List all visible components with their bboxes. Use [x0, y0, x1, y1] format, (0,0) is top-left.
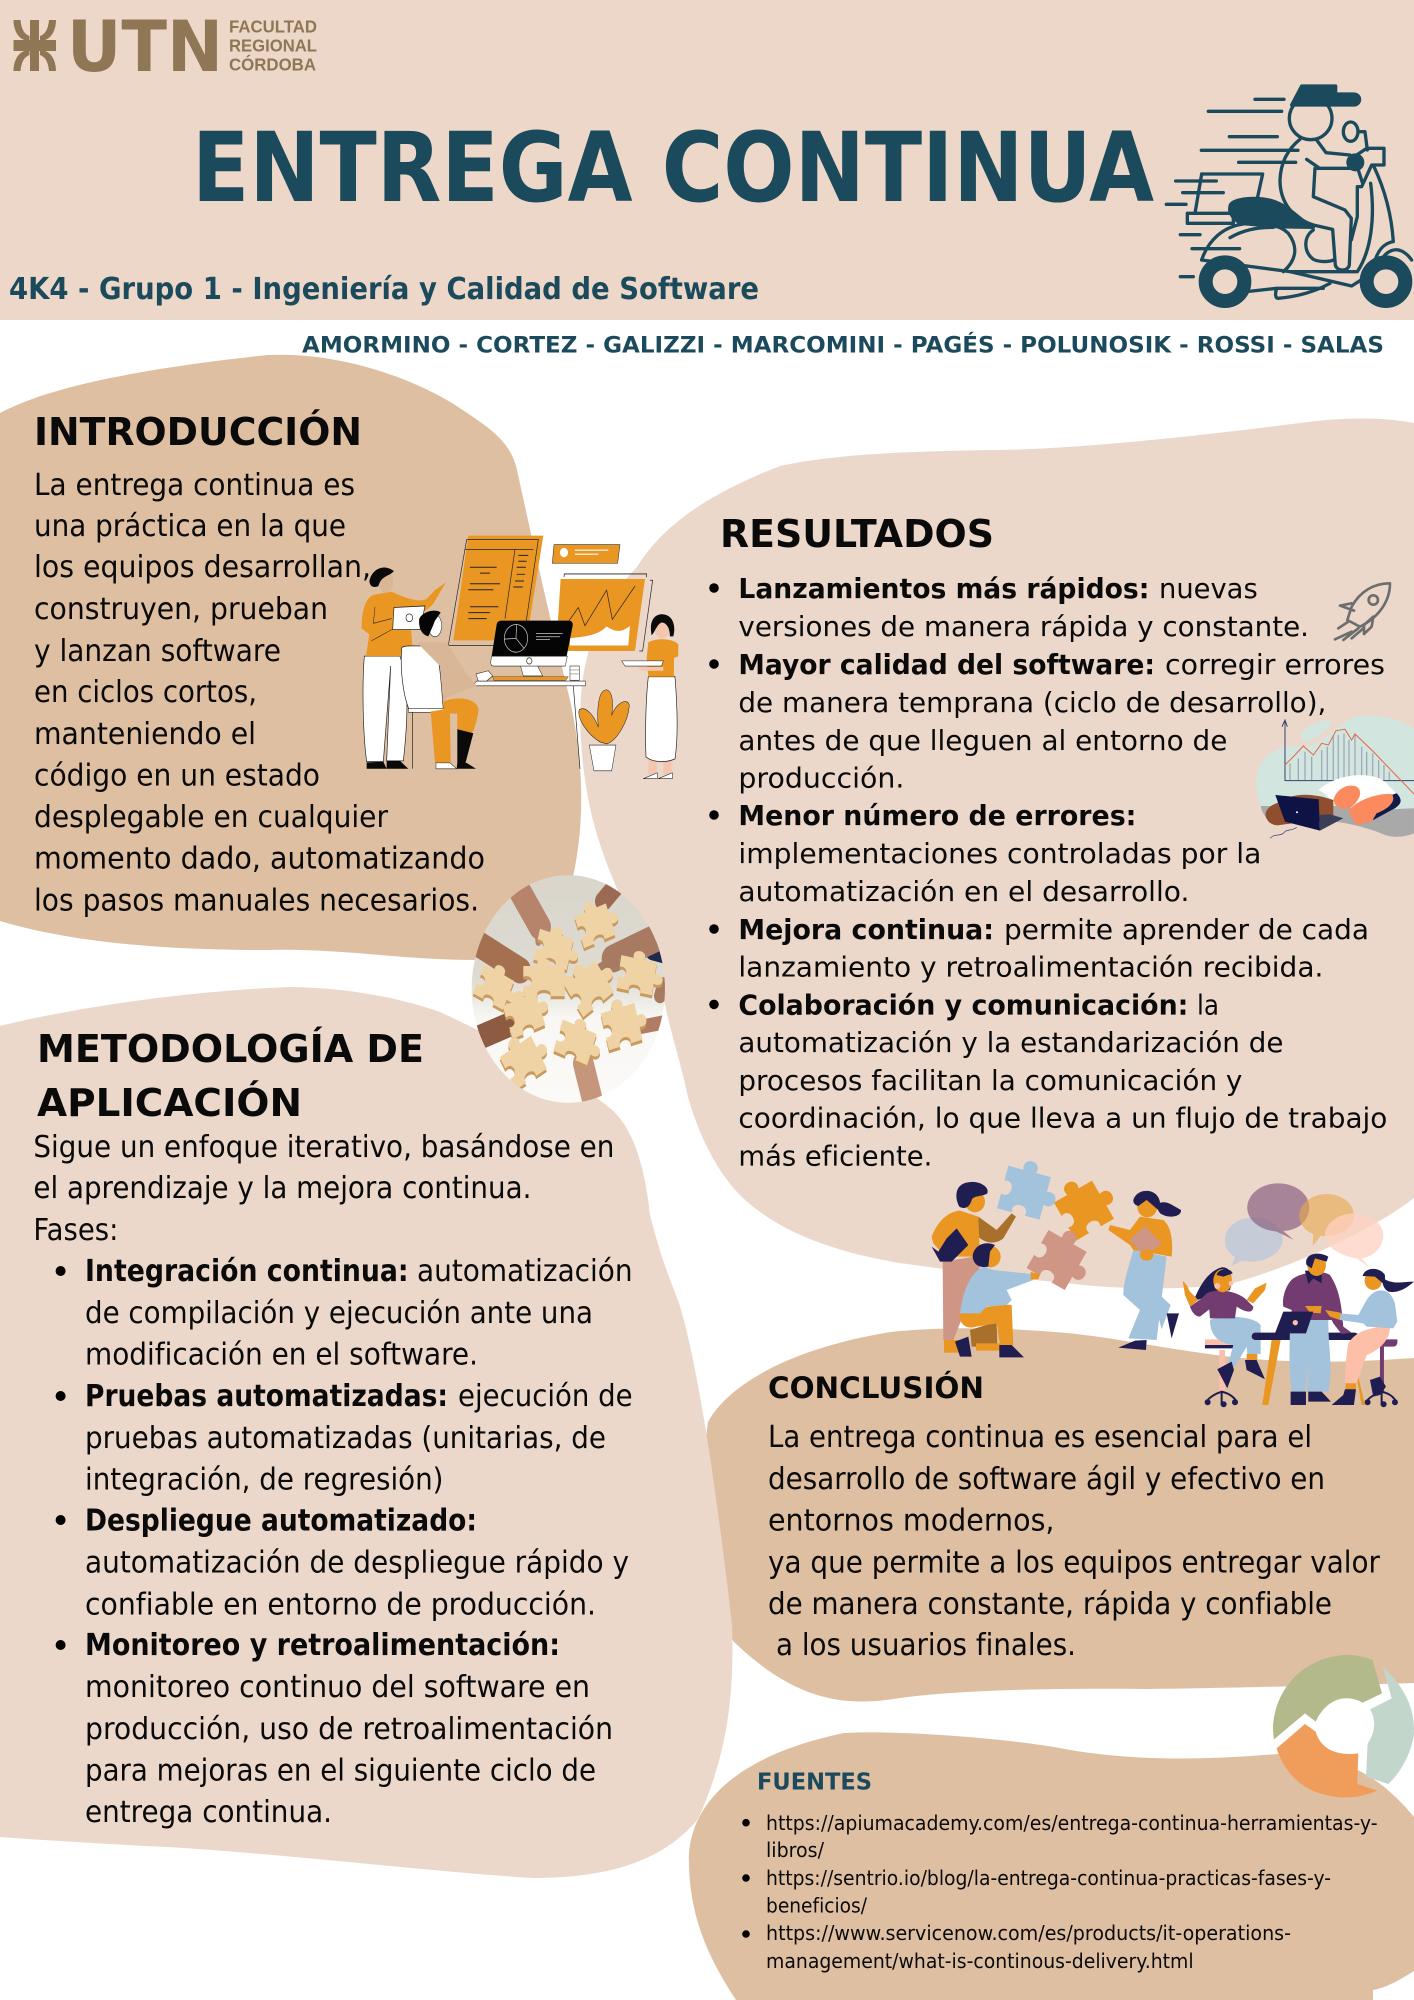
list: fases: automatización	[417, 1254, 633, 1289]
text block: conclusion: La entrega continua es esencial para el	[768, 1420, 1312, 1455]
text block: introduccion: y lanzan software	[34, 634, 281, 669]
line chart panel	[556, 574, 653, 651]
header band	[0, 0, 1414, 320]
panel: introduccion background	[0, 355, 581, 960]
list: fuentes: libros/	[766, 1838, 824, 1862]
text block: introduccion: desplegable en cualquier	[34, 800, 388, 835]
list: resultados: Mejora continua:	[738, 913, 994, 946]
heading: metodologia: APLICACIÓN	[37, 1079, 302, 1126]
monitor	[491, 621, 573, 676]
code panel	[448, 536, 543, 645]
desk	[473, 666, 585, 769]
text block: conclusion	[768, 1420, 1380, 1663]
list: fases: producción, uso de retroalimentación	[85, 1712, 613, 1747]
list: fases: integración, de regresión)	[85, 1462, 444, 1497]
logo subtitle: FACULTAD	[229, 17, 317, 37]
woman holding piece	[1108, 1191, 1181, 1350]
list: resultados: automatización en el desarrollo.	[738, 875, 1189, 908]
list: fases: Integración continua:	[85, 1254, 409, 1289]
text block: introduccion: código en un estado	[34, 758, 320, 794]
standing man	[362, 568, 446, 769]
list: resultados: nuevas	[1159, 572, 1258, 605]
standing woman	[622, 614, 678, 779]
text block: introduccion: momento dado, automatizando	[34, 842, 485, 876]
list: resultados: lanzamiento y retroalimentación recibida.	[738, 951, 1323, 984]
standing man at laptop	[1275, 1254, 1352, 1405]
list: resultados: Colaboración y comunicación:	[738, 988, 1188, 1021]
list: resultados: más eficiente.	[738, 1139, 932, 1172]
text block: introduccion: los pasos manuales necesarios.	[34, 884, 479, 918]
logo subtitle: REGIONAL	[229, 36, 317, 56]
seated person	[401, 611, 493, 769]
text block: introduccion: en ciclos cortos,	[34, 675, 257, 710]
puzzle pieces	[472, 910, 663, 1089]
hands	[470, 885, 668, 1097]
seated woman right	[1325, 1269, 1414, 1407]
list: resultados: permite aprender de cada	[1004, 913, 1369, 946]
panel: fuentes background	[689, 1732, 1414, 2000]
plant	[579, 690, 629, 771]
list: fases: entrega continua.	[85, 1795, 332, 1830]
text block: introduccion: La entrega continua es	[34, 468, 355, 503]
list: resultados: versiones de manera rápida y constante.	[738, 610, 1309, 643]
list: resultados	[709, 572, 1387, 1172]
list: resultados: implementaciones controladas por la	[738, 837, 1261, 870]
subtitle: 4K4 - Grupo 1 - Ingeniería y Calidad de Software	[9, 272, 759, 307]
list: resultados: de manera temprana (ciclo de desarrollo),	[738, 686, 1326, 719]
table group: seated woman	[1183, 1267, 1267, 1407]
list: fases: Monitoreo y retroalimentación:	[85, 1628, 560, 1663]
crouching man	[955, 1243, 1040, 1357]
text block: conclusion: de manera constante, rápida y confiable	[768, 1587, 1332, 1622]
illustration: developers at desk	[362, 536, 678, 779]
list: fuentes: https://sentrio.io/blog/la-entrega-continua-practicas-fases-y-	[766, 1866, 1331, 1890]
list: fuentes: management/what-is-continous-delivery.html	[766, 1949, 1194, 1973]
logo: UTN	[14, 6, 317, 88]
list: resultados: la	[1197, 988, 1219, 1021]
list: fases: Despliegue automatizado:	[85, 1504, 477, 1538]
text block: conclusion: entornos modernos,	[768, 1504, 1054, 1538]
list: resultados: Mayor calidad del software:	[738, 648, 1155, 681]
text block: introduccion	[34, 468, 485, 918]
list: fases: automatización de despliegue rápido y	[85, 1546, 629, 1581]
panel: resultados background	[580, 418, 1414, 1288]
puzzle pieces	[997, 1156, 1123, 1295]
illustration: tired developer with falling chart	[1257, 716, 1414, 838]
list: resultados: producción.	[738, 762, 904, 794]
photo: hands assembling puzzle	[467, 872, 670, 1109]
icon: rocket	[1335, 583, 1390, 640]
heading: metodologia: METODOLOGÍA DE	[37, 1025, 424, 1072]
list: fases: monitoreo continuo del software en	[85, 1670, 590, 1705]
list: fases: para mejoras en el siguiente ciclo de	[85, 1754, 596, 1788]
list: fuentes	[742, 1811, 1378, 1973]
logo subtitle	[229, 17, 317, 75]
list: fuentes: https://www.servicenow.com/es/products/it-operations-	[766, 1921, 1291, 1945]
text block: metodologia intro	[33, 1130, 614, 1248]
logo wordmark: UTN	[67, 6, 223, 88]
text block: introduccion: manteniendo el	[34, 717, 256, 752]
icon: UTN emblem	[14, 20, 56, 71]
panel: metodologia background	[0, 987, 733, 1878]
list: fuentes: beneficios/	[766, 1894, 867, 1918]
text block: conclusion: desarrollo de software ágil y efectivo en	[768, 1462, 1325, 1497]
list: resultados: procesos facilitan la comunicación y	[738, 1064, 1242, 1097]
list: fases: ejecución de	[458, 1379, 633, 1414]
list: resultados: automatización y la estandarización de	[738, 1026, 1283, 1059]
list: fases: de compilación y ejecución ante una	[85, 1296, 593, 1331]
speech bubbles	[1225, 1183, 1383, 1267]
list: resultados: antes de que lleguen al entorno de	[738, 724, 1227, 757]
table	[1252, 1333, 1365, 1405]
standing woman with book	[932, 1182, 1016, 1353]
text block: metodologia intro: el aprendizaje y la mejora continua.	[33, 1171, 531, 1206]
heading: resultados: RESULTADOS	[720, 512, 994, 557]
icon: continuous cycle ring	[1273, 1655, 1414, 1798]
heading: metodologia	[37, 1025, 424, 1126]
notification card	[552, 545, 620, 563]
heading: conclusion: CONCLUSIÓN	[768, 1371, 984, 1405]
list: fases: pruebas automatizadas (unitarias, de	[85, 1421, 606, 1456]
text block: introduccion: una práctica en la que	[34, 509, 346, 544]
text block: metodologia intro: Sigue un enfoque iterativo, basándose en	[33, 1130, 614, 1165]
list: resultados: coordinación, lo que lleva a un flujo de trabajo	[738, 1102, 1387, 1135]
list: fases: confiable en entorno de producción.	[85, 1587, 596, 1622]
illustration: team assembling puzzle	[932, 1156, 1414, 1407]
list: fuentes: https://apiumacademy.com/es/entrega-continua-herramientas-y-	[766, 1811, 1378, 1835]
list: resultados: corregir errores	[1165, 648, 1385, 681]
text block: introduccion: los equipos desarrollan,	[34, 550, 371, 585]
list: fases: Pruebas automatizadas:	[85, 1379, 448, 1414]
heading: introduccion: INTRODUCCIÓN	[34, 408, 362, 455]
list: resultados: Lanzamientos más rápidos:	[738, 572, 1149, 605]
authors: AMORMINO - CORTEZ - GALIZZI - MARCOMINI - PAGÉS - POLUNOSIK - ROSSI - SALAS	[302, 333, 1384, 359]
list: resultados: Menor número de errores:	[738, 799, 1136, 832]
list: fases: modificación en el software.	[85, 1337, 478, 1372]
text block: introduccion: construyen, prueban	[34, 592, 328, 627]
list: fases	[56, 1254, 633, 1830]
heading: fuentes: FUENTES	[757, 1767, 872, 1795]
title: ENTREGA CONTINUA	[192, 112, 1154, 224]
text block: conclusion: a los usuarios finales.	[776, 1628, 1076, 1663]
text block: metodologia intro: Fases:	[33, 1213, 118, 1248]
panel: conclusion background	[704, 1328, 1414, 1701]
icon: scooter delivery rider	[1166, 86, 1412, 301]
logo subtitle: CÓRDOBA	[229, 54, 316, 75]
